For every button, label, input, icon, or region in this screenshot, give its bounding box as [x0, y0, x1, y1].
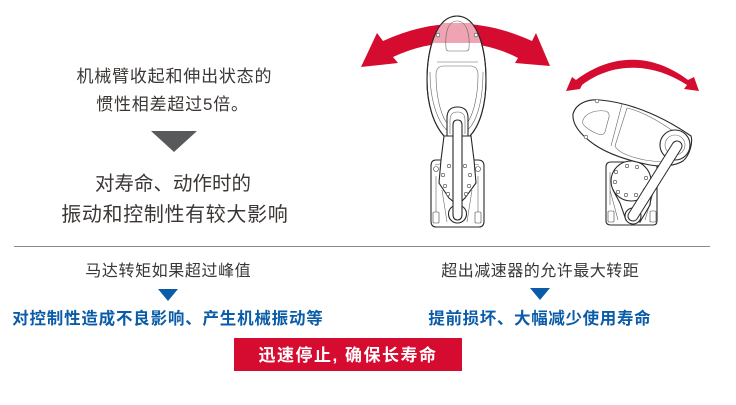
intro text: inertia difference: 机械臂收起和伸出状态的 [76, 67, 272, 86]
small red double arrow [566, 60, 699, 91]
conclusion text: impact on life and vibration: 振动和控制性有较大影响 [61, 203, 288, 226]
gray down arrow [151, 131, 197, 152]
robot lower arm housing [439, 136, 476, 203]
blue down arrow right [530, 288, 550, 300]
right effect: damage and shortened life: 提前损坏、大幅减少使用寿命 [428, 308, 651, 328]
left effect: control and vibration: 对控制性造成不良影响、产生机械振动等 [12, 308, 324, 328]
intro text: inertia difference: 惯性相差超过5倍。 [96, 95, 249, 114]
divider line [14, 246, 710, 247]
right cause: exceeds reducer torque: 超出减速器的允许最大转距 [441, 262, 639, 280]
conclusion text: impact on life and vibration: 对寿命、动作时的 [95, 173, 251, 195]
conclusion text: impact on life and vibration [61, 173, 288, 226]
robot base [606, 162, 657, 225]
robot elbow and link [633, 130, 690, 216]
robot elbow and link [447, 107, 468, 220]
blue down arrow left [158, 289, 178, 301]
robot base [431, 160, 484, 227]
red conclusion banner: 迅速停止, 确保长寿命 [259, 345, 437, 365]
robot upper arm shell [426, 16, 487, 136]
robot arm: retracted [573, 99, 692, 225]
robot gear housing [611, 161, 652, 224]
intro text: inertia difference [76, 67, 272, 114]
left cause: motor torque exceeds peak: 马达转矩如果超过峰值 [85, 262, 251, 280]
robot arm: extended [426, 16, 487, 228]
red conclusion banner [234, 338, 462, 371]
robot upper arm shell [573, 99, 692, 166]
large red double arrow [361, 24, 550, 67]
